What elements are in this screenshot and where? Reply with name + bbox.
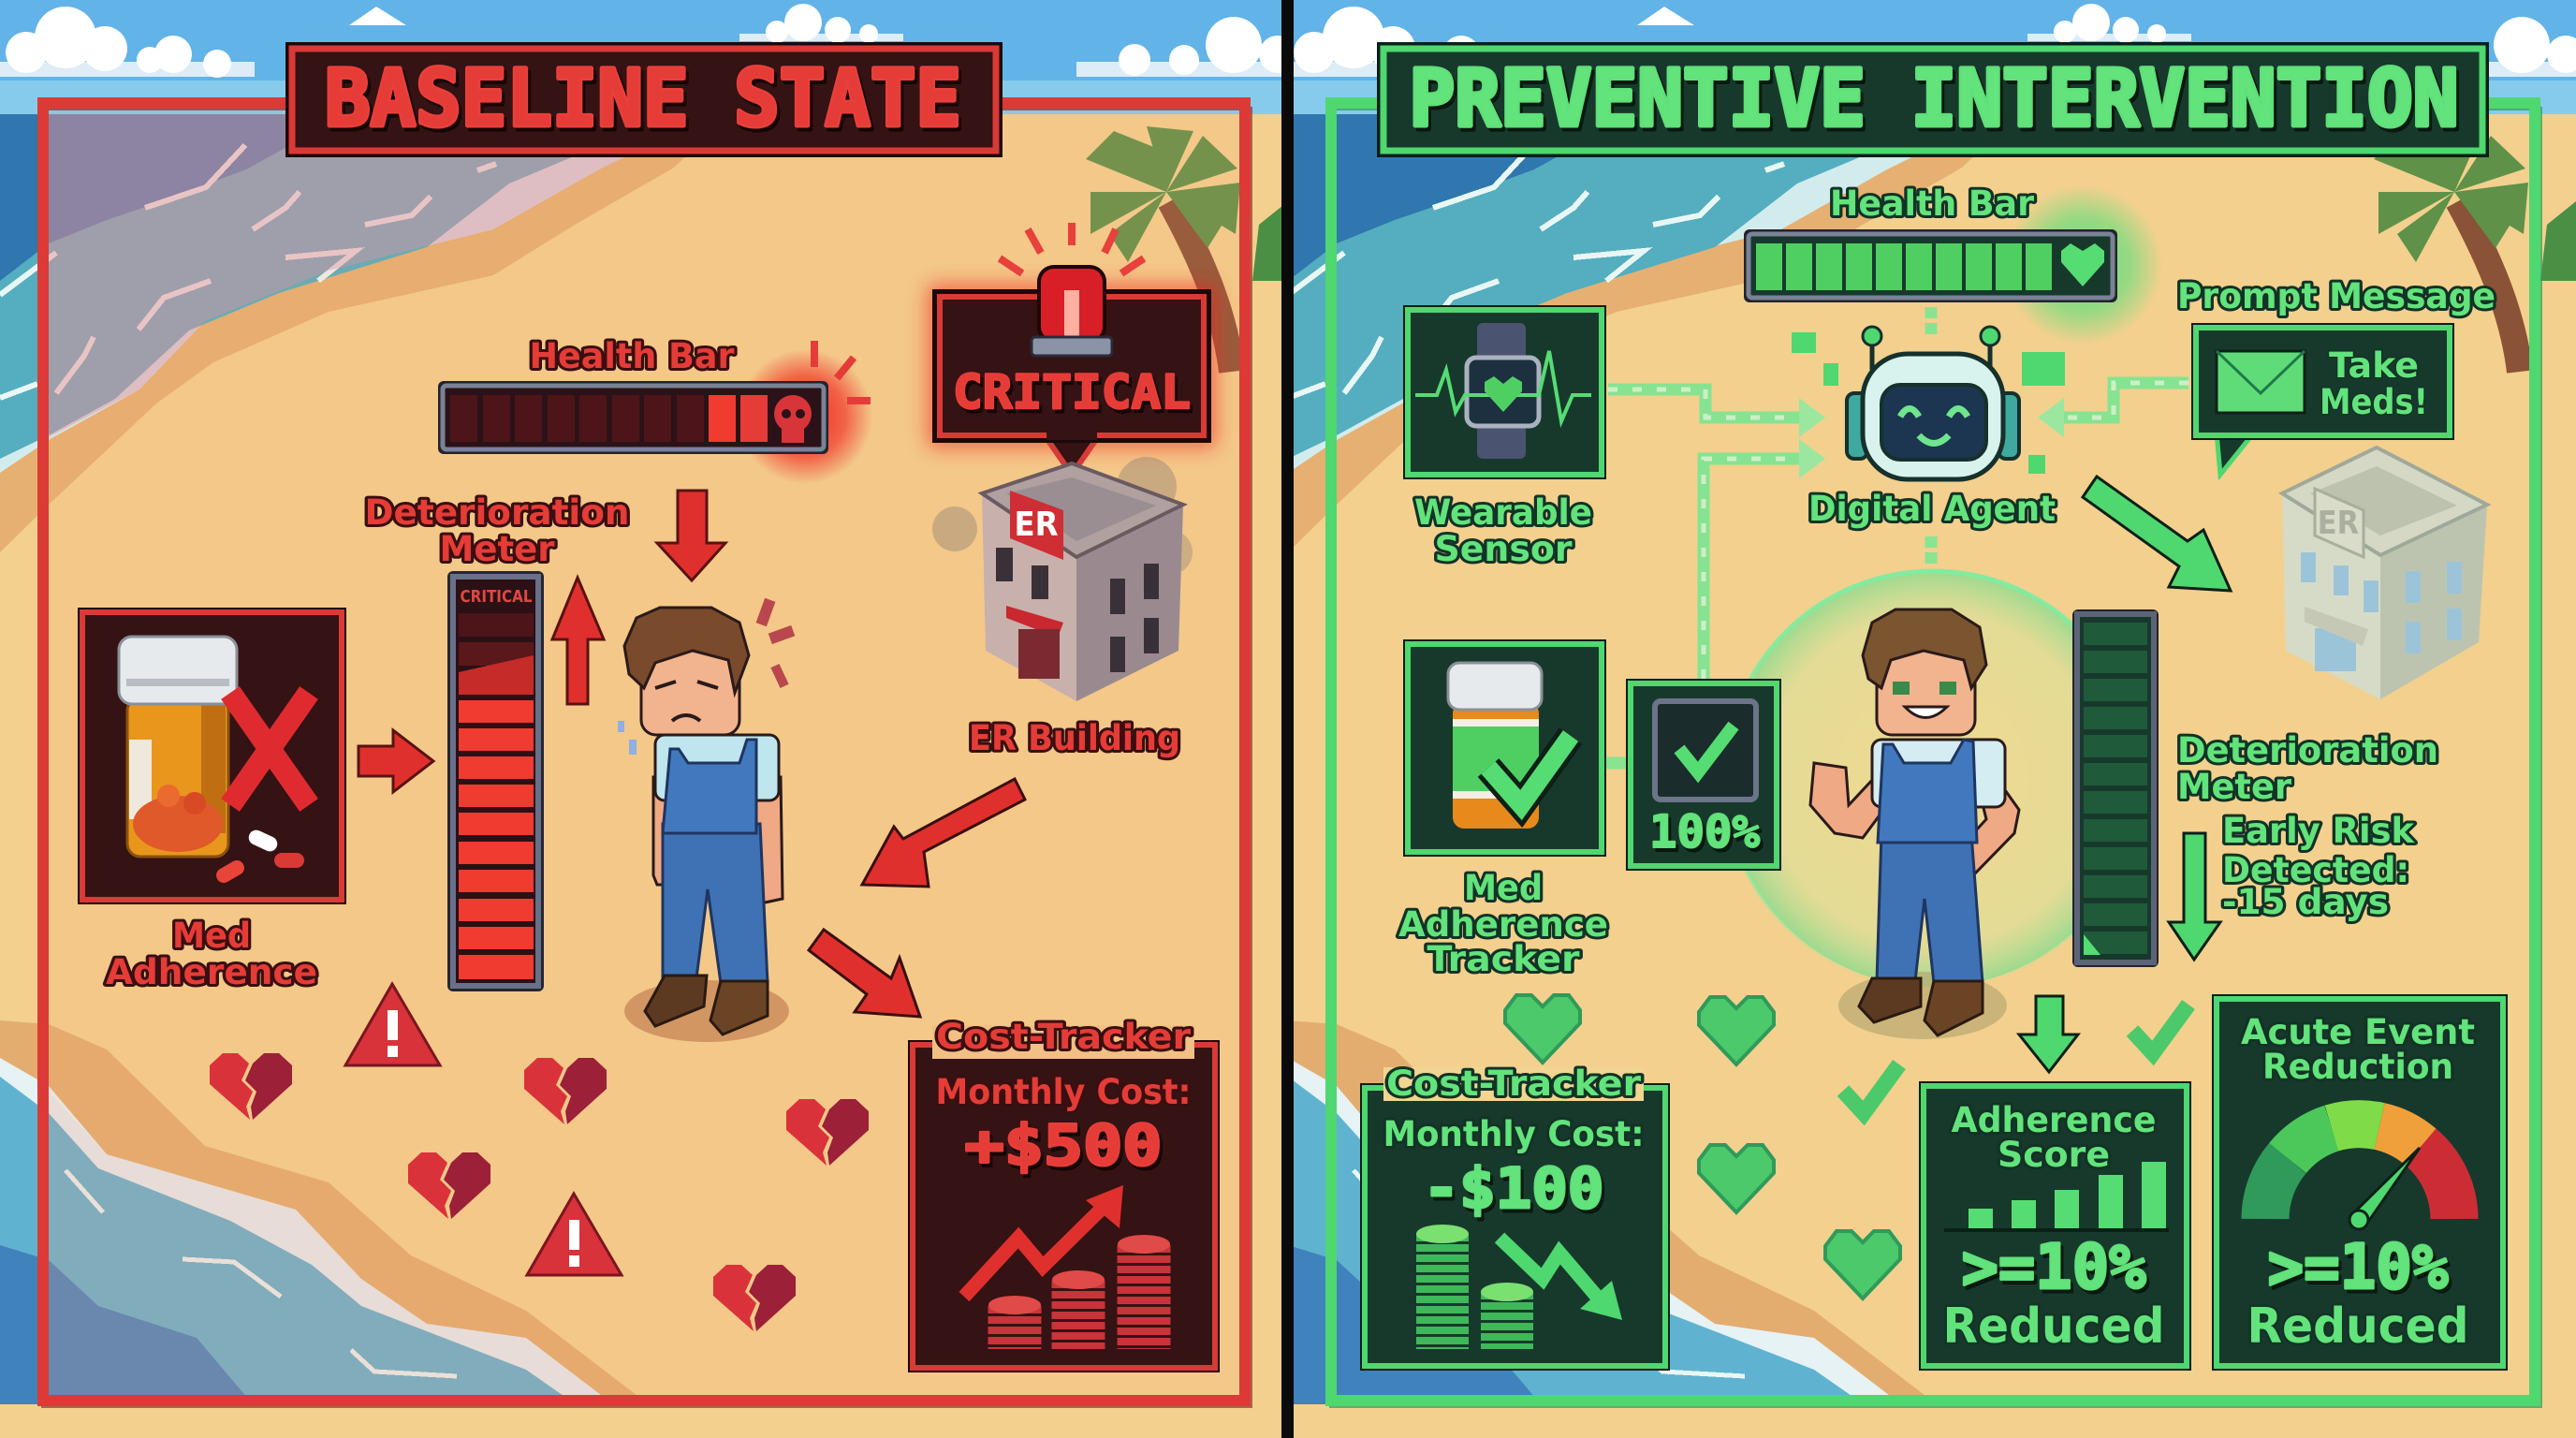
label: deterioration meter (2177, 730, 2438, 807)
text: early risk detected: Detected: (2222, 850, 2409, 890)
card: adherence score (1919, 1081, 2191, 1371)
card: 100% adherence: 100% (1649, 806, 1760, 858)
card: cost tracker baseline: +$500 (964, 1113, 1163, 1179)
background: right beach scene (1288, 0, 2576, 1438)
label: med adherence tracker: Med (1464, 868, 1543, 908)
card: acute event reduction: >=10% (2267, 1231, 2449, 1303)
label: med adherence: Adherence (106, 952, 317, 992)
arms (653, 777, 676, 885)
ER sign (1010, 491, 1063, 560)
icon: check 1 (2132, 1005, 2188, 1053)
siren rays (1000, 223, 1144, 273)
overall bib (1878, 740, 1977, 843)
warning icons and broken hearts (210, 984, 869, 1331)
ER sign: ER (1014, 506, 1059, 544)
glow (2003, 185, 2162, 345)
title: baseline state: BASELINE STATE (325, 52, 961, 144)
icon: red X (230, 693, 309, 805)
card: cost tracker intervention: Cost-Tracker (1386, 1064, 1642, 1104)
label: med adherence tracker (1398, 868, 1608, 979)
arrow: adherence to meter (359, 730, 433, 792)
icon: broken heart 3 (786, 1099, 869, 1166)
callout tail and box (1046, 438, 1097, 475)
label: deterioration meter: Deterioration (365, 492, 629, 533)
icon: digital agent robot (1792, 327, 2065, 479)
label: deterioration meter: Deterioration (2177, 730, 2438, 770)
connector: tracker to agent (1704, 439, 1825, 679)
icon: coin stacks (1416, 1225, 1533, 1349)
label: deterioration meter: Meter (440, 529, 555, 569)
card: adherence score: Score (1998, 1135, 2110, 1175)
connector: tracker to 100% card (1606, 756, 1626, 770)
card: acute event reduction: Acute Event (2241, 1012, 2475, 1052)
card: acute event reduction (2212, 994, 2508, 1371)
legs (663, 824, 768, 983)
callout: prompt message (2191, 323, 2454, 475)
divider between panels (1281, 0, 1294, 1438)
card: 100% adherence (1626, 679, 1781, 871)
title: preventive intervention: PREVENTIVE INTERVENTION (1410, 52, 2458, 144)
shirt (1872, 740, 2005, 807)
icon: coin stacks (988, 1235, 1170, 1349)
icon: heart 4 (1825, 1231, 1900, 1299)
card: acute event reduction: Reduction (2262, 1047, 2453, 1087)
chart: adherence bars (1944, 1162, 2169, 1232)
icon: heart 2 (1699, 997, 1774, 1064)
icon: skull (774, 395, 812, 443)
chart: falling line (1500, 1238, 1622, 1320)
panel: baseline state frame (43, 103, 1251, 1406)
connector: agent to patient (1925, 536, 1938, 568)
card: med adherence (78, 608, 346, 904)
label: med adherence tracker: Adherence (1398, 904, 1608, 945)
icon: envelope (2217, 351, 2305, 413)
face (1877, 651, 1975, 735)
shirt (655, 735, 779, 800)
icon: smartwatch (1415, 323, 1591, 459)
hair (624, 608, 749, 693)
arrow: risk decreasing (2169, 833, 2220, 960)
label: wearable sensor: Wearable (1414, 492, 1592, 533)
icon: checkbox (1655, 701, 1756, 800)
shield bubble around patient (1725, 571, 2141, 987)
callout: prompt message: Meds! (2320, 382, 2428, 422)
chart: rising line (964, 1185, 1123, 1297)
hair (1863, 609, 1986, 688)
chart: gauge (2265, 1124, 2454, 1229)
icon: check 2 (1843, 1064, 1899, 1113)
text: early risk detected: Early Risk (2222, 811, 2415, 851)
label: med adherence: Med (172, 916, 251, 956)
face (641, 651, 739, 735)
hearts and checks (1505, 995, 2188, 1299)
connector: health bar to agent (1925, 307, 1938, 339)
label: deterioration meter: Meter (2177, 767, 2292, 807)
icon: warning triangle 2 (527, 1194, 622, 1275)
connectors: data paths (1606, 307, 2188, 763)
arrow: health to patient (657, 491, 725, 580)
icon: heart 1 (1505, 995, 1580, 1063)
icon: capsules (213, 828, 304, 886)
card: cost tracker baseline: Cost-Tracker (936, 1017, 1192, 1057)
icon: heart (2061, 243, 2104, 286)
arrow: ER to patient (862, 779, 1025, 887)
icon: heart 3 (1699, 1145, 1774, 1212)
label: prompt message: Prompt Message (2177, 276, 2496, 316)
sweat and pain marks (618, 598, 795, 755)
label: med adherence tracker: Tracker (1427, 939, 1580, 979)
deterioration meter: empty green (2072, 609, 2159, 967)
glow (738, 349, 872, 484)
background: left panel tint (43, 103, 1245, 1404)
icon: pill bottle (1448, 663, 1542, 829)
icon: warning triangle 1 (345, 984, 440, 1065)
ground shadow (1838, 972, 2007, 1039)
icon: checkmark (1488, 736, 1571, 805)
health bar: baseline: Health Bar (530, 336, 735, 376)
card: cost tracker baseline: Monthly Cost: (936, 1072, 1191, 1112)
connector: prompt to agent (2038, 383, 2188, 437)
character: healthy patient (1810, 609, 2019, 1039)
icon: damaged ER building (932, 457, 1193, 701)
arrow: patient to adherence (2019, 996, 2078, 1072)
text: early risk detected (2222, 811, 2415, 922)
ER sign (2315, 489, 2364, 557)
arrow: meter rising (552, 578, 604, 704)
icon: broken heart 4 (408, 1152, 490, 1219)
icon: broken heart 5 (713, 1265, 796, 1331)
callout glow (927, 284, 1217, 448)
panel: preventive intervention frame (1331, 103, 2540, 1406)
boots (1859, 978, 1921, 1022)
label: ER building: ER Building (969, 718, 1180, 758)
background: left beach scene (0, 0, 1296, 1438)
connector: wearable to agent (1608, 389, 1825, 437)
akimbo arm (1956, 768, 2019, 875)
boots (645, 976, 707, 1026)
eyes and mouth (655, 682, 718, 721)
card: adherence score: Adherence (1951, 1100, 2157, 1140)
label: med adherence (106, 916, 317, 992)
label: deterioration meter (365, 492, 629, 569)
card: med adherence tracker (1403, 639, 1606, 857)
arrow: patient to cost (809, 930, 920, 1017)
eyes and smile (1893, 682, 1956, 717)
overall bib (663, 740, 756, 833)
health bar: baseline (438, 336, 872, 484)
deterioration meter: full red (447, 571, 544, 991)
arrow: agent avoiding ER (2083, 477, 2231, 591)
raised arm and fist (1810, 763, 1887, 838)
label: wearable sensor (1414, 492, 1592, 569)
health bar: intervention: Health Bar (1830, 183, 2035, 224)
card: cost tracker intervention: -$100 (1423, 1156, 1604, 1222)
card: wearable sensor (1403, 305, 1606, 479)
critical alert: callout with siren (927, 223, 1217, 475)
card: adherence score: Reduced (1943, 1299, 2164, 1355)
text: early risk detected: -15 days (2222, 882, 2389, 922)
character: unwell patient (618, 598, 795, 1042)
legs (1877, 833, 1983, 983)
card: adherence score: >=10% (1962, 1231, 2146, 1303)
label: wearable sensor: Sensor (1434, 529, 1573, 569)
health bar: intervention (1744, 183, 2162, 345)
card: cost tracker intervention: Monthly Cost: (1383, 1114, 1644, 1154)
icon: broken heart 1 (210, 1053, 292, 1120)
card: cost tracker baseline (908, 1017, 1220, 1372)
gauge needle (2349, 1148, 2420, 1229)
siren (1032, 267, 1112, 356)
deterioration meter: full red: CRITICAL (461, 587, 532, 607)
card: cost tracker intervention (1360, 1064, 1670, 1371)
critical alert: callout with siren: CRITICAL (953, 365, 1191, 419)
icon: pill bottle (119, 637, 237, 857)
ER sign: ER (2318, 505, 2359, 542)
icon: broken heart 2 (524, 1058, 607, 1124)
card: acute event reduction: Reduced (2247, 1299, 2469, 1355)
icon: healthy ER building (2282, 448, 2487, 699)
ground shadow (624, 980, 789, 1042)
label: digital agent: Digital Agent (1808, 489, 2056, 529)
callout: prompt message: Take (2329, 345, 2419, 386)
